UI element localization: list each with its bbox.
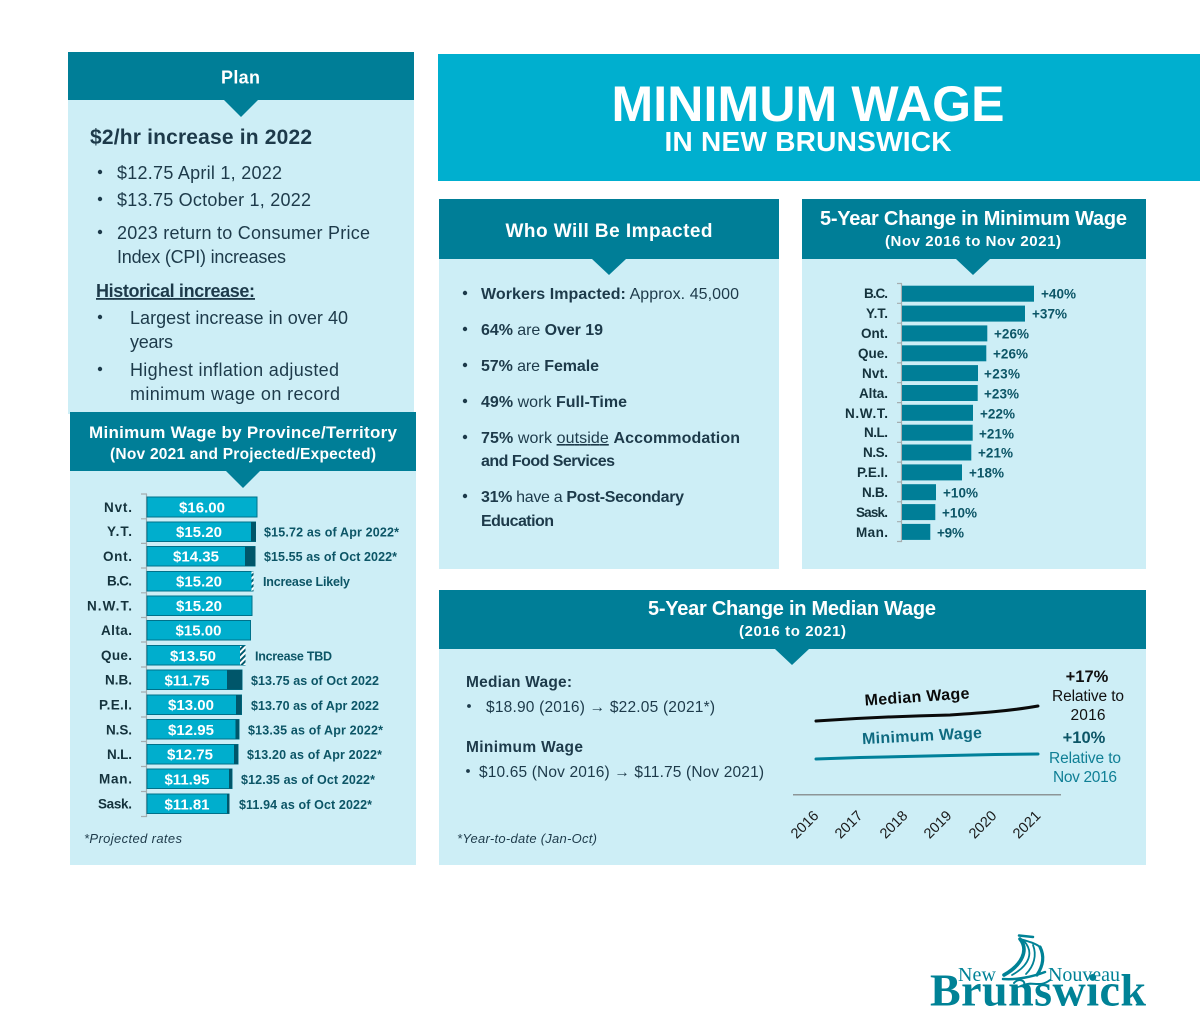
row: N.W.T.: $15.20 bbox=[176, 598, 222, 615]
row: Que.: Que. bbox=[101, 648, 132, 663]
row: Que.: $13.50 bbox=[170, 648, 216, 665]
row: N.W.T.: N.W.T. bbox=[87, 598, 132, 614]
panel: 5-year change in minimum wage bbox=[802, 199, 1146, 569]
minimum wage change bar chart: Y.T. bbox=[866, 306, 888, 321]
province header bbox=[70, 412, 416, 488]
row: N.B.: N.B. bbox=[105, 672, 132, 688]
row: B.C.: $15.20 bbox=[176, 574, 222, 590]
plan header: Plan bbox=[221, 68, 260, 88]
minimum wage change bar chart: Que. bbox=[858, 346, 888, 361]
year axis labels: 2021 bbox=[1010, 808, 1044, 842]
minimum wage change bar chart: +21% bbox=[979, 426, 1014, 442]
minimum wage text bbox=[466, 739, 764, 781]
minimum wage change bar chart: +21% bbox=[978, 446, 1013, 460]
plan bullets: $13.75 October 1, 2022 bbox=[117, 190, 311, 210]
minimum wage change bar chart: +10% bbox=[942, 506, 977, 520]
line chart bbox=[788, 668, 1124, 842]
year axis labels: 2016 bbox=[788, 808, 822, 842]
row: Man. bbox=[99, 769, 375, 788]
panel: plan bbox=[68, 52, 414, 414]
title banner bbox=[438, 54, 1200, 181]
who bullets: 64% are Over 19 bbox=[481, 322, 603, 339]
row: P.E.I.: P.E.I. bbox=[99, 698, 132, 712]
historical increase heading: Historical increase: bbox=[96, 281, 255, 301]
row: Y.T.: Y.T. bbox=[107, 524, 132, 539]
row: N.S.: N.S. bbox=[106, 722, 132, 738]
minimum wage text: $10.65 (Nov 2016) → $11.75 (Nov 2021) bbox=[479, 764, 764, 781]
row: N.L.: $12.75 bbox=[167, 746, 213, 764]
row: P.E.I. bbox=[99, 695, 379, 714]
row: Y.T.: $15.72 as of Apr 2022* bbox=[264, 526, 399, 540]
row: Ont.: $15.55 as of Oct 2022* bbox=[264, 550, 397, 564]
panel: minimum wage by province bbox=[70, 412, 416, 865]
who bullets: Workers Impacted: Approx. 45,000 bbox=[481, 286, 739, 303]
row: Ont.: $14.35 bbox=[173, 548, 219, 566]
row: N.L. bbox=[107, 744, 382, 764]
who bullets: and Food Services bbox=[481, 453, 615, 470]
year axis labels: 2019 bbox=[921, 808, 955, 842]
row: N.L.: N.L. bbox=[107, 747, 132, 762]
minimum wage change header: (Nov 2016 to Nov 2021) bbox=[885, 233, 1061, 250]
median wage header: (2016 to 2021) bbox=[739, 623, 846, 640]
who bullets: 57% are Female bbox=[481, 358, 599, 375]
callout: minimum +10%: Nov 2016 bbox=[1053, 769, 1117, 786]
median wage text: $18.90 (2016) → $22.05 (2021*) bbox=[486, 699, 715, 716]
plan bullets: $12.75 April 1, 2022 bbox=[117, 163, 282, 183]
row: Man.: $11.95 bbox=[164, 772, 210, 788]
row: Que.: Increase TBD bbox=[255, 650, 332, 664]
row: Nvt: Nvt. bbox=[104, 500, 132, 515]
minimum wage change bar chart: +23% bbox=[984, 386, 1019, 402]
minimum wage change header bbox=[802, 199, 1146, 275]
year axis labels: 2020 bbox=[966, 808, 1000, 842]
row: P.E.I.: $13.00 bbox=[168, 697, 214, 714]
callout: median +17%: 2016 bbox=[1070, 707, 1106, 724]
who bullets: Education bbox=[481, 513, 554, 530]
row: Alta. bbox=[101, 620, 250, 640]
row: Alta.: $15.00 bbox=[176, 622, 221, 640]
row: B.C.: Increase Likely bbox=[263, 575, 350, 589]
row: Ont. bbox=[103, 546, 397, 566]
minimum wage change bar chart: +18% bbox=[969, 466, 1004, 480]
minimum wage change bar chart: +23% bbox=[984, 366, 1020, 382]
row: Man.: Man. bbox=[99, 772, 132, 786]
minimum wage change bar chart: P.E.I. bbox=[857, 465, 888, 480]
row: N.L.: $13.20 as of Apr 2022* bbox=[247, 748, 382, 762]
year axis labels bbox=[788, 808, 1044, 842]
minimum wage change bar chart: +26% bbox=[994, 326, 1029, 342]
row: Alta.: Alta. bbox=[101, 623, 132, 638]
historical bullets: years bbox=[130, 332, 173, 352]
minimum wage line bbox=[816, 754, 1038, 759]
row: N.B.: $11.75 bbox=[164, 672, 210, 690]
historical bullets: Largest increase in over 40 bbox=[130, 308, 348, 328]
row: N.S. bbox=[106, 720, 383, 739]
row: N.B. bbox=[105, 670, 379, 690]
median wage text bbox=[466, 674, 715, 716]
row: N.S.: $13.35 as of Apr 2022* bbox=[248, 724, 383, 738]
who bullets: 75% work outside Accommodation bbox=[481, 430, 740, 447]
callout: median +17%: +17% bbox=[1066, 668, 1109, 686]
logo wordmark: Brunswick bbox=[930, 964, 1146, 1016]
plan heading: $2/hr increase in 2022 bbox=[90, 126, 312, 149]
plan bullets: 2023 return to Consumer Price bbox=[117, 223, 370, 243]
footnote: year-to-date: *Year-to-date (Jan-Oct) bbox=[457, 831, 597, 846]
minimum wage text: Minimum Wage bbox=[466, 739, 583, 756]
historical bullets: minimum wage on record bbox=[130, 384, 340, 404]
minimum wage change bar chart bbox=[845, 284, 1076, 542]
historical bullets: Highest inflation adjusted bbox=[130, 360, 339, 380]
minimum wage change bar chart: N.W.T. bbox=[845, 406, 888, 421]
median wage line label: Median Wage bbox=[864, 685, 970, 710]
row: N.B.: $13.75 as of Oct 2022 bbox=[251, 674, 379, 688]
year axis labels: 2018 bbox=[877, 808, 911, 842]
who bullets: 31% have a Post-Secondary bbox=[481, 489, 684, 506]
callout: minimum +10%: +10% bbox=[1063, 729, 1106, 747]
minimum wage change bar chart: +9% bbox=[937, 526, 964, 540]
plan bullets bbox=[98, 163, 370, 267]
row: N.W.T. bbox=[87, 596, 252, 616]
row: Sask.: Sask. bbox=[98, 796, 132, 812]
plan header bbox=[68, 52, 414, 117]
minimum wage change bar chart: Ont. bbox=[861, 326, 888, 341]
row: B.C.: B.C. bbox=[107, 574, 132, 588]
minimum wage change bar chart: N.B. bbox=[862, 485, 888, 500]
callout: median +17%: Relative to bbox=[1052, 688, 1124, 705]
minimum wage change bar chart: Man. bbox=[856, 525, 888, 540]
panel: who will be impacted bbox=[439, 199, 779, 569]
callout: median +17% bbox=[1052, 668, 1124, 724]
median wage text: Median Wage: bbox=[466, 674, 572, 691]
minimum wage change header: 5-Year Change in Minimum Wage bbox=[820, 208, 1127, 230]
median wage line bbox=[816, 706, 1038, 721]
who header bbox=[439, 199, 779, 275]
province header: (Nov 2021 and Projected/Expected) bbox=[110, 446, 376, 463]
callout: minimum +10%: Relative to bbox=[1049, 750, 1121, 767]
row: Y.T.: $15.20 bbox=[176, 524, 222, 541]
row: Sask.: $11.94 as of Oct 2022* bbox=[239, 798, 372, 812]
median wage header: 5-Year Change in Median Wage bbox=[648, 598, 936, 620]
who header: Who Will Be Impacted bbox=[506, 221, 712, 242]
minimum wage change bar chart: Nvt. bbox=[862, 366, 888, 381]
who bullets: 49% work Full-Time bbox=[481, 394, 627, 411]
plan bullets: Index (CPI) increases bbox=[117, 247, 286, 267]
median wage header bbox=[439, 590, 1146, 665]
logo wordmark: Nouveau bbox=[1048, 964, 1120, 986]
row: Sask. bbox=[98, 794, 372, 814]
title banner: IN NEW BRUNSWICK bbox=[664, 126, 952, 157]
historical bullets bbox=[98, 308, 348, 404]
row: P.E.I.: $13.70 as of Apr 2022 bbox=[251, 699, 379, 713]
row: Nvt: $16.00 bbox=[179, 500, 225, 516]
province bar chart bbox=[87, 494, 399, 817]
minimum wage line label: Minimum Wage bbox=[862, 725, 982, 748]
row: B.C. bbox=[107, 572, 350, 591]
footnote: projected rates: *Projected rates bbox=[84, 831, 182, 846]
row: Que. bbox=[101, 646, 332, 665]
panel: 5-year change in median wage bbox=[439, 590, 1146, 865]
minimum wage change bar chart: +22% bbox=[980, 406, 1015, 422]
title banner: MINIMUM WAGE bbox=[612, 76, 1004, 132]
minimum wage change bar chart: N.S. bbox=[863, 445, 888, 460]
minimum wage change bar chart: +26% bbox=[993, 346, 1028, 362]
minimum wage change bar chart: N.L. bbox=[864, 425, 888, 440]
minimum wage change bar chart: B.C. bbox=[864, 286, 888, 301]
row: Man.: $12.35 as of Oct 2022* bbox=[241, 773, 375, 787]
minimum wage change bar chart: +10% bbox=[943, 486, 978, 500]
minimum wage change bar chart: +37% bbox=[1032, 306, 1067, 322]
logo wordmark: New bbox=[958, 964, 997, 986]
callout: minimum +10% bbox=[1049, 729, 1121, 786]
province header: Minimum Wage by Province/Territory bbox=[89, 423, 398, 442]
minimum wage change bar chart: Sask. bbox=[856, 505, 888, 520]
row: Nvt bbox=[104, 497, 257, 517]
row: N.S.: $12.95 bbox=[168, 722, 214, 739]
row: Ont.: Ont. bbox=[103, 549, 132, 564]
year axis labels: 2017 bbox=[832, 808, 866, 842]
who bullets bbox=[463, 286, 740, 530]
minimum wage change bar chart: +40% bbox=[1041, 286, 1076, 302]
logo: New Brunswick bbox=[930, 936, 1146, 1016]
row: Sask.: $11.81 bbox=[164, 796, 210, 814]
row: Y.T. bbox=[107, 522, 399, 542]
icon: ship bbox=[1003, 936, 1050, 985]
minimum wage change bar chart: Alta. bbox=[859, 386, 888, 401]
